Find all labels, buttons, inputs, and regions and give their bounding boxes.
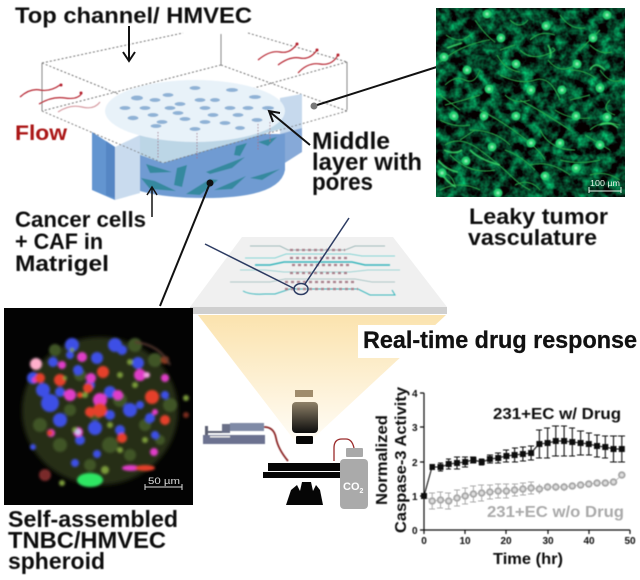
axes (420, 393, 630, 534)
scale bar: 50 um (145, 476, 182, 490)
left block (115, 135, 140, 200)
label: middle layer with pores: Middle (312, 128, 390, 155)
callout lines: chip zoom (205, 218, 349, 294)
heading: real-time drug response: Real-time drug response (363, 327, 637, 354)
y axis title (374, 387, 410, 533)
right block (280, 94, 302, 136)
y axis title: Caspase-3 Activity (393, 387, 410, 533)
axis tick labels: 20 (500, 536, 512, 547)
bright ringed cells (439, 11, 610, 196)
heading: top channel: Top channel/ HMVEC (15, 3, 252, 28)
icon: microscope objective (292, 390, 318, 444)
panel: chip device schematic (20, 33, 347, 200)
label: cancer cells (15, 207, 146, 276)
icon: CO2 tank: 2 (360, 488, 364, 495)
image: leaky tumor vasculature (436, 8, 625, 197)
olive-green background cells (33, 338, 177, 471)
series label: without drug: 231+EC w/o Drug (487, 504, 624, 521)
label: cancer cells: Cancer cells (15, 207, 146, 232)
series: without drug (424, 472, 625, 509)
axis tick labels: 4 (412, 389, 418, 400)
scale bar: 100 um: 100 µm (590, 179, 620, 188)
y axis title: Normalized (374, 415, 391, 505)
scale bar: 50 um: 50 µm (148, 476, 180, 486)
connector: to vasculature image (310, 65, 443, 110)
yellow light cone (198, 315, 446, 445)
icon: microscope stage (263, 463, 346, 505)
label: middle layer with pores (312, 128, 422, 196)
label: middle layer with pores: layer with (312, 149, 422, 176)
icon: syringe pump (203, 423, 288, 461)
axis tick labels: 3 (412, 423, 418, 434)
arrow: middle layer (269, 111, 310, 145)
cancer cells (141, 137, 280, 195)
axis tick labels: 10 (459, 536, 471, 547)
top disc with pores (105, 80, 285, 142)
caption: spheroid: TNBC/HMVEC (8, 527, 166, 553)
arrow: cancer cells (147, 187, 157, 217)
axis tick labels (412, 389, 636, 547)
icon: CO2 tank (334, 439, 368, 509)
axis tick labels: 2 (412, 458, 418, 469)
icon: CO2 tank: CO (343, 481, 360, 493)
axis tick labels: 1 (412, 492, 418, 503)
axis tick labels: 30 (542, 536, 554, 547)
label: middle layer with pores: pores (312, 169, 373, 196)
flow streaks (20, 44, 338, 112)
image: spheroid (4, 308, 193, 505)
caption: spheroid: Self-assembled (8, 506, 178, 532)
lower plate edges (42, 111, 347, 163)
bright spots (30, 358, 42, 370)
x axis title: Time (hr) (493, 551, 563, 568)
axis tick labels: 0 (421, 536, 427, 547)
axis tick labels: 0 (412, 526, 418, 537)
scale bar: 100 um (589, 179, 621, 193)
axis tick labels: 50 (624, 536, 636, 547)
caption: leaky tumor vasculature (468, 204, 608, 250)
caption: spheroid (8, 506, 178, 574)
label: cancer cells: + CAF in (15, 229, 103, 254)
caption: leaky tumor vasculature: vasculature (468, 225, 597, 250)
lower cylinder (140, 134, 285, 198)
series: with drug (421, 426, 625, 499)
caption: leaky tumor vasculature: Leaky tumor (469, 204, 608, 229)
label: cancer cells: Matrigel (15, 251, 109, 276)
connector: to spheroid image (160, 180, 214, 306)
panel: microfluidic chip plate (190, 237, 447, 314)
top channel outline (42, 33, 347, 113)
arrow: top channel (123, 26, 135, 61)
vertical pore links (158, 122, 270, 160)
chip channels (230, 246, 400, 295)
axis tick labels: 40 (583, 536, 595, 547)
label: flow: Flow (15, 122, 68, 145)
caption: spheroid: spheroid (8, 548, 105, 574)
series label: with drug: 231+EC w/ Drug (493, 406, 621, 423)
chart: caspase-3 activity (374, 387, 636, 568)
